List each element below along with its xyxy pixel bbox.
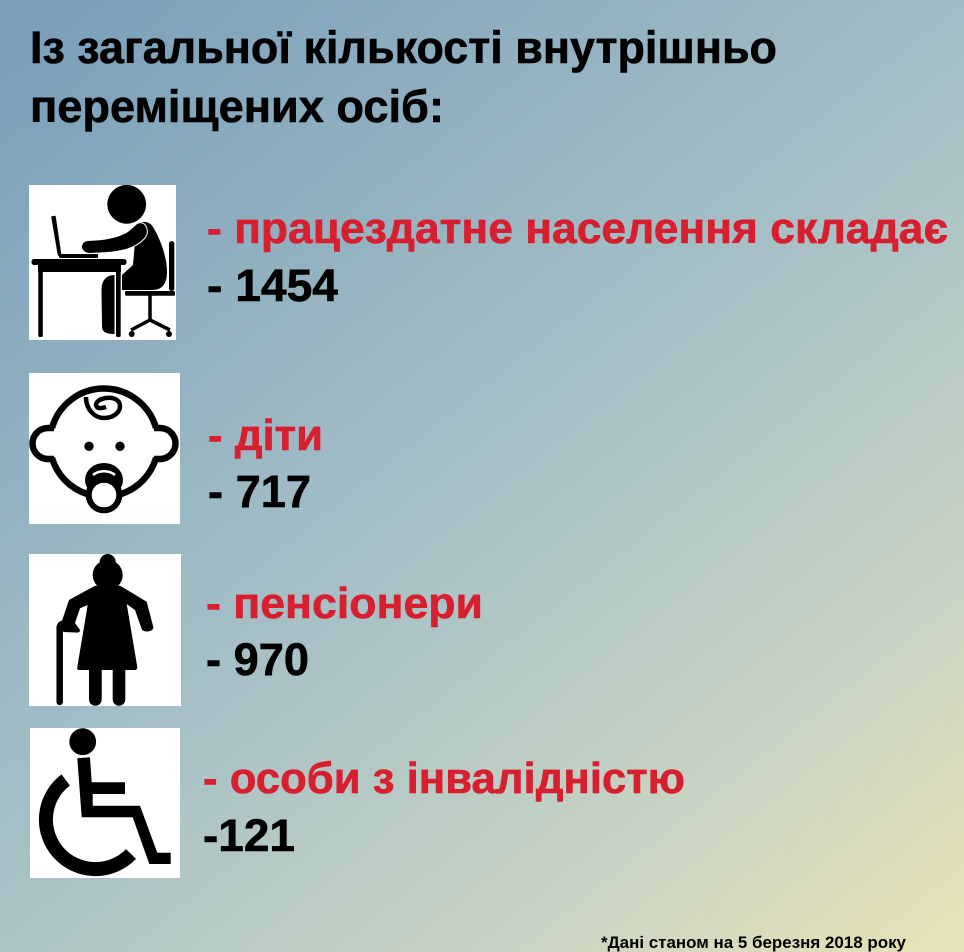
label: children: - діти <box>208 411 323 460</box>
footnote: *Дані станом на 5 березня 2018 року <box>601 933 907 952</box>
number: 970: - 970 <box>206 634 309 685</box>
title <box>30 22 777 132</box>
panel: working-age population <box>29 185 948 340</box>
label: working-age population: - працездатне населення складає <box>207 204 948 253</box>
number: 717: - 717 <box>208 466 311 517</box>
icon: wheelchair symbol <box>30 728 180 878</box>
icon: person working at laptop <box>29 185 176 340</box>
icon: elderly woman with cane <box>29 554 181 706</box>
number: 1454: - 1454 <box>207 260 338 311</box>
panel: children <box>29 373 323 524</box>
panel: pensioners <box>29 554 483 706</box>
icon: baby face with pacifier <box>29 373 180 524</box>
label: pensioners: - пенсіонери <box>206 579 483 628</box>
label: persons with disabilities: - особи з інвалідністю <box>203 754 685 803</box>
title: Із загальної кількості внутрішньо <box>30 22 777 73</box>
number: 121: -121 <box>203 810 295 861</box>
panel: persons with disabilities <box>30 728 685 878</box>
title: переміщених осіб: <box>30 81 444 132</box>
